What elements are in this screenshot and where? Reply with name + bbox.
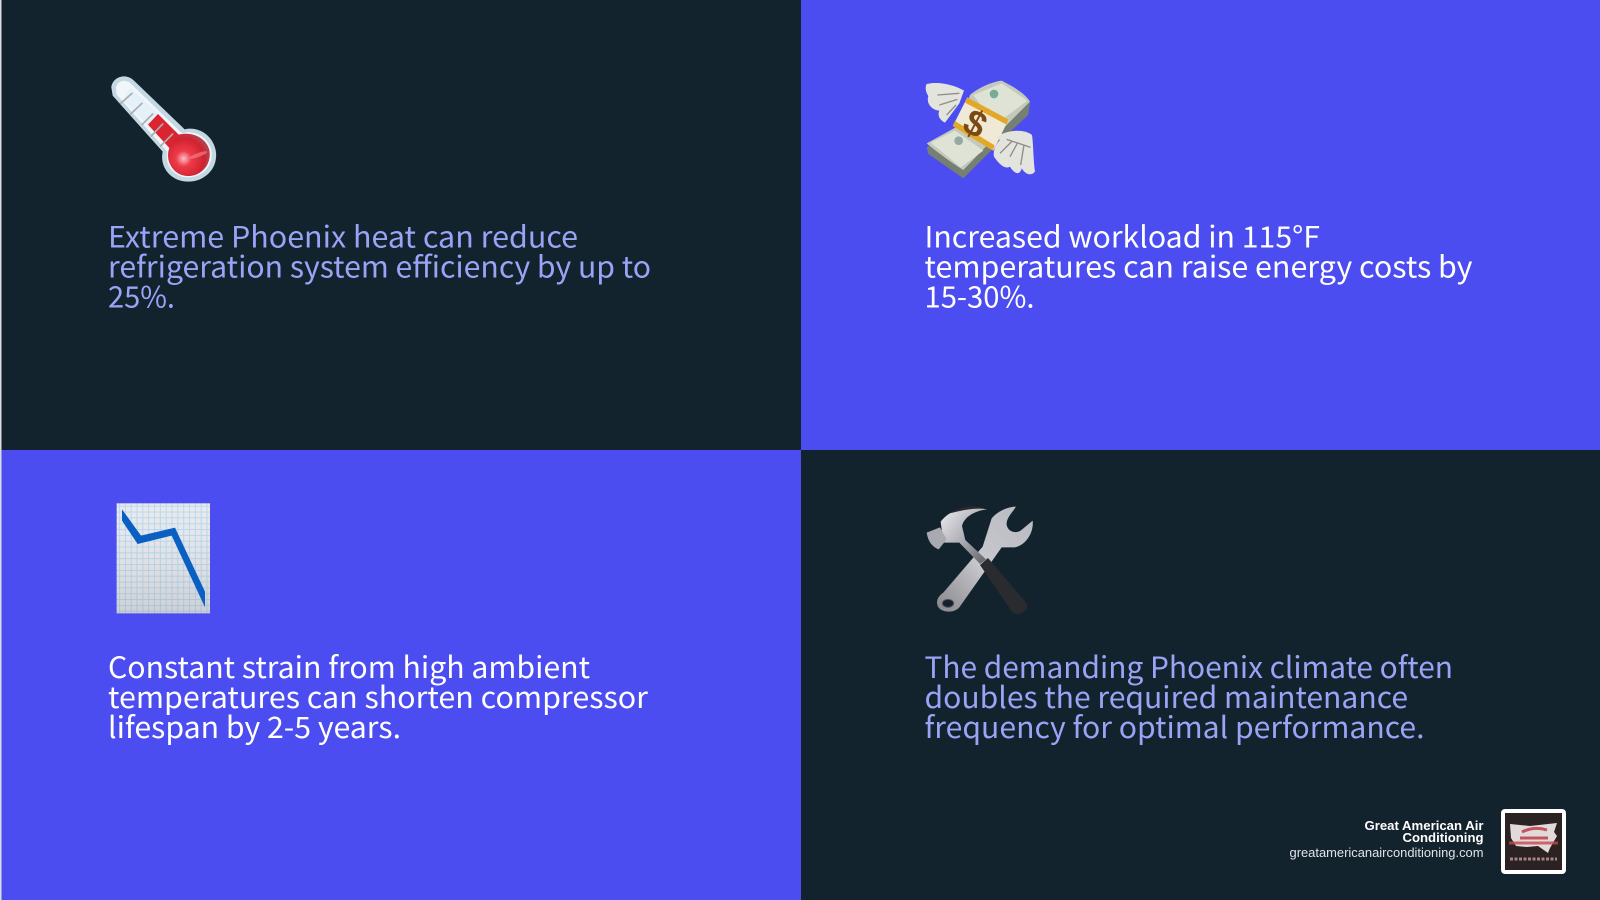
text: energy costs <box>924 214 1472 316</box>
text: maintenance <box>924 645 1453 747</box>
text: energy costs: 15-30%. <box>924 274 1034 316</box>
brand block <box>1290 809 1566 874</box>
text: maintenance: The demanding Phoenix climate often <box>924 645 1453 687</box>
text: maintenance: frequency for optimal performance. <box>924 705 1424 747</box>
text: compressor <box>108 645 649 747</box>
text: energy costs: temperatures can raise energy costs by <box>924 244 1472 286</box>
brand name: Great American Air <box>1364 819 1484 833</box>
panel: maintenance <box>801 450 1600 900</box>
brand name <box>1364 819 1484 845</box>
icon: thermometer <box>111 76 216 182</box>
icon: declining chart <box>117 503 210 613</box>
text: compressor: Constant strain from high ambient <box>108 645 590 687</box>
text: maintenance: doubles the required maintenance <box>924 675 1408 717</box>
brand name: Conditioning <box>1402 831 1484 845</box>
text: compressor: temperatures can shorten compressor <box>108 675 649 717</box>
text: efficiency: Extreme Phoenix heat can reduce <box>108 214 578 256</box>
icon: money with wings <box>926 81 1035 178</box>
brand url: greatamericanairconditioning.com <box>1290 846 1484 860</box>
text: efficiency: 25%. <box>108 274 175 316</box>
text: efficiency: refrigeration system efficiency by up to <box>108 244 651 286</box>
icon: hammer and wrench <box>927 506 1033 614</box>
panel: energy costs <box>801 0 1600 450</box>
text: energy costs: Increased workload in 115°F <box>924 214 1320 256</box>
logo <box>1501 809 1566 874</box>
text: efficiency <box>108 214 651 316</box>
panel: reduced efficiency <box>0 0 801 450</box>
text: compressor: lifespan by 2-5 years. <box>108 705 401 747</box>
icon: money with wings: $ <box>957 101 994 146</box>
panel: compressor lifespan <box>0 450 801 900</box>
